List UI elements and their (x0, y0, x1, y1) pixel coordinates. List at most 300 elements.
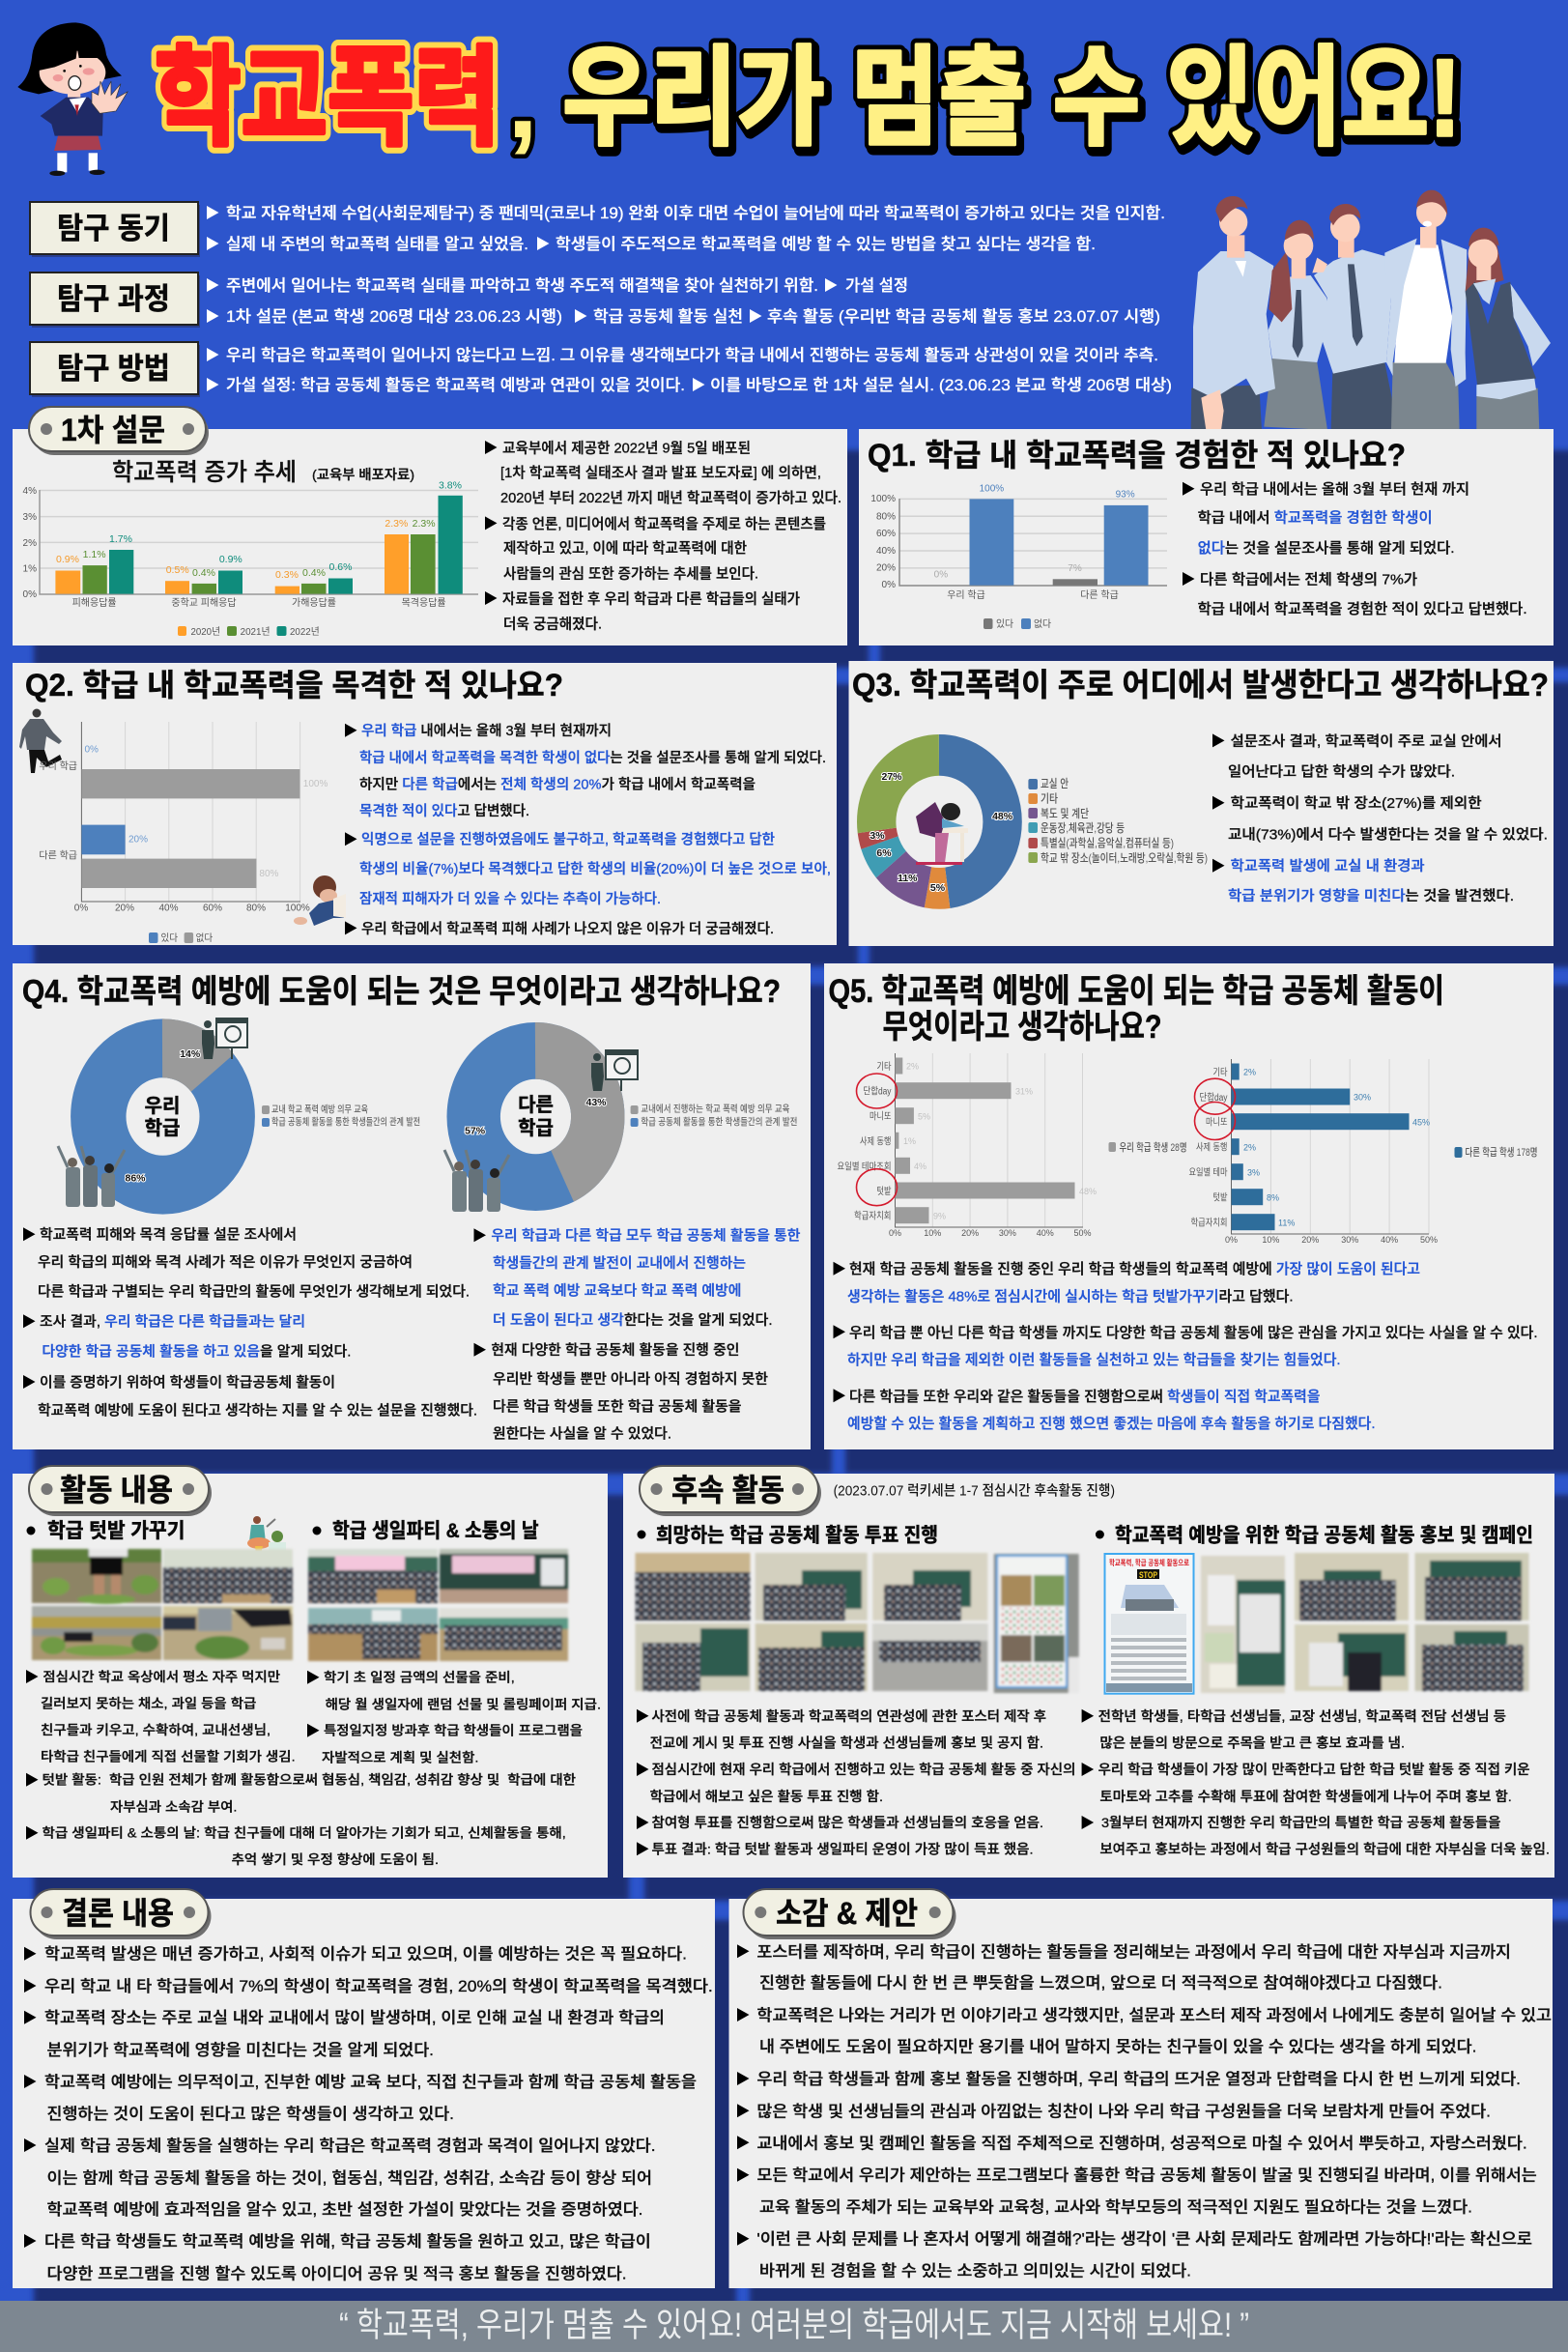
bar chart: school violence trend: 0% (23, 589, 37, 600)
text block: 생각하는 활동은 48%로 점심시간에 실시하는 학급 텃밭가꾸기라고 답했다. (847, 1289, 1293, 1305)
text block: vote notes: 사전에 학급 공동체 활동과 학교폭력의 연관성에 관한 포스터 제작 후 (651, 1708, 1046, 1724)
text block: 학급 내에서 학교폭력을 목격한 학생이 없다는 것을 설문조사를 통해 알게 되었다. (359, 750, 826, 766)
donut chart: 다른 학급: 57% (465, 1126, 486, 1137)
bar chart: 우리 학급 학생: 50% (1073, 1228, 1092, 1238)
photos: campaign (1201, 1553, 1528, 1693)
bar chart Q1: 우리 학급 (947, 589, 985, 601)
heading Q2: Q2. 학급 내 학교폭력을 목격한 적 있나요? (25, 668, 563, 703)
text block: 교내(73%)에서 다수 발생한다는 것을 알 수 있었다. (1228, 826, 1548, 843)
text block: reflections: 학교폭력은 나와는 거리가 먼 이야기라고 생각했지만, 설문과 포스터 제작 과정에서 나에게도 충분히 일어날 수 있고 (756, 2006, 1552, 2024)
text block: reflections: '이런 큰 사회 문제를 나 혼자서 어떻게 해결해?'라는 생각이 '큰 사회 문제라도 함께라면 가능하다!'라는 확신으로 (756, 2230, 1532, 2249)
bar chart: 다른 학급 학생: 30% (1341, 1235, 1358, 1245)
legend: 2020년 (191, 626, 220, 638)
bar chart: 다른 학급 학생: 단합day (1200, 1092, 1227, 1104)
text block right: 학생들간의 관계 발전이 교내에서 진행하는 (493, 1255, 746, 1272)
donut chart: 다른 학급: 학급 (518, 1117, 554, 1139)
bar chart: 다른 학급 학생: 45% (1412, 1117, 1430, 1127)
legend (149, 932, 213, 944)
text block right: 원한다는 사실을 알 수 있었다. (493, 1426, 671, 1443)
bar chart Q1: 100% (980, 483, 1004, 495)
heading Q5 (829, 973, 1444, 1046)
text block: 하지만 우리 학급을 제외한 이런 활동들을 실천하고 있는 학급들을 찾기는 힘들었다. (847, 1352, 1341, 1368)
text block: reflections: 진행한 활동들에 다시 한 번 큰 뿌듯함을 느꼈으며, 앞으로 더 적극적으로 참여해야겠다고 다짐했다. (759, 1974, 1442, 1993)
text block: inquiry summary lines: 1차 설문 (본교 학생 206명 대상 23.06.23 시행) (226, 307, 562, 326)
text block: birthday notes (307, 1671, 601, 1764)
bar chart: 우리 학급 학생: 단합day (864, 1086, 891, 1098)
bar chart: 다른 학급 학생: 학급자치회 (1190, 1218, 1227, 1229)
text block: 우리 학급에서 학교폭력 피해 사례가 나오지 않은 이유가 더 궁금해졌다. (361, 921, 774, 937)
text block: reflections: 교육 활동의 주체가 되는 교육부와 교육청, 교사와 학부모등의 적극적인 지원도 필요하다는 것을 느꼈다. (759, 2197, 1472, 2216)
bar chart: 다른 학급 학생: 10% (1262, 1235, 1279, 1245)
bar chart Q1: 0% (882, 580, 896, 590)
text block: reflections: 교내에서 홍보 및 캠페인 활동을 직접 주체적으로 진행하며, 성공적으로 마칠 수 있어서 뿌듯하고, 자랑스러웠다. (756, 2134, 1527, 2152)
donut chart: 우리 학급 (99, 1048, 420, 1185)
bar chart: school violence trend: 0.5% (166, 564, 189, 576)
text block left: 학교폭력 예방에 도움이 된다고 생각하는 지를 알 수 있는 설문을 진행했다. (38, 1403, 477, 1420)
icon: crying child (294, 875, 346, 926)
icon: gardener (247, 1516, 286, 1554)
pill heading: 후속 활동: 후속 활동 (671, 1473, 784, 1507)
poster: campaign (1105, 1554, 1194, 1694)
bar chart: school violence trend: 피해응답률 (72, 596, 117, 609)
bar chart: 다른 학급 학생: 2% (1243, 1067, 1256, 1076)
text block: 교육부에서 제공한 2022년 9월 5일 배포된 (502, 440, 751, 456)
panel: Q2 (13, 663, 837, 945)
text block: 학교폭력이 학교 밖 장소(27%)를 제외한 (1231, 795, 1482, 812)
red circles (856, 1074, 897, 1206)
text block right: 현재 다양한 학급 공동체 활동을 진행 중인 (491, 1342, 739, 1359)
donut chart: 다른 학급: 43% (585, 1097, 607, 1108)
title (155, 38, 1464, 162)
text block: reflections: 모든 학교에서 우리가 제안하는 프로그램보다 훌륭한 학급 공동체 활동이 발굴 및 진행되길 바라며, 이를 위해서는 (756, 2166, 1537, 2185)
text block: conclusions: 실제 학급 공동체 활동을 실행하는 우리 학급은 학교폭력 경험과 목격이 일어나지 않았다. (44, 2137, 656, 2155)
text block: campaign notes: 전학년 학생들, 타학급 선생님들, 교장 선생님, 학교폭력 전담 선생님 등 (1098, 1708, 1506, 1724)
photos: garden (32, 1549, 293, 1660)
text block: vote notes: 투표 결과: 학급 텃밭 활동과 생일파티 운영이 가장 많이 득표 했음. (651, 1842, 1034, 1857)
text block: garden notes: 길러보지 못하는 채소, 과일 등을 학급 (41, 1697, 256, 1711)
donut chart Q3: 6% (876, 847, 892, 859)
bar chart: 다른 학급 학생: 50% (1420, 1235, 1438, 1245)
text block: 목격한 적이 있다고 답변했다. (359, 803, 529, 819)
text block: garden notes: 친구들과 키우고, 수확하여, 교내선생님, (41, 1723, 271, 1737)
text block left: 다른 학급과 구별되는 우리 학급만의 활동에 무엇인가 생각해보게 되었다. (38, 1283, 470, 1300)
bar chart: 다른 학급 학생: 20% (1301, 1235, 1319, 1245)
text block: activity effects: 학급 생일파티 & 소통의 날: 학급 친구들에 대해 더 알아가는 기회가 되고, 신체활동을 통해, (43, 1826, 566, 1841)
bar chart: school violence trend: 1.1% (83, 549, 106, 560)
text block (1183, 481, 1527, 617)
text block: 2020년 부터 2022년 까지 매년 학교폭력이 증가하고 있다. (500, 490, 841, 506)
text block: birthday notes: 학기 초 일정 금액의 선물을 준비, (324, 1671, 515, 1685)
bar chart Q1 (870, 483, 1167, 630)
heading Q5: 무엇이라고 생각하나요? (883, 1009, 1161, 1046)
bar chart: 다른 학급 학생: 마니또 (1206, 1117, 1227, 1129)
text block: reflections: 포스터를 제작하며, 우리 학급이 진행하는 활동들을 정리해보는 과정에서 우리 학급에 대한 자부심과 지금까지 (756, 1942, 1511, 1961)
text block: inquiry summary lines: 가설 설정 (845, 276, 908, 295)
text block: vote notes: 학급에서 해보고 싶은 활동 투표 진행 함. (650, 1789, 883, 1804)
text block: 예방할 수 있는 활동을 계획하고 진행 했으면 좋겠는 마음에 후속 활동을 하기로 다짐했다. (847, 1416, 1376, 1432)
bar chart: 다른 학급 학생 (1188, 1059, 1538, 1245)
pill heading: 1차 설문: 1차 설문 (61, 413, 165, 447)
bar chart Q1: 93% (1116, 489, 1135, 501)
bar chart: 다른 학급 학생: 3% (1247, 1167, 1260, 1177)
chart heading: 학교폭력 증가 추세 (112, 459, 297, 486)
text block: 학급 내에서 학교폭력을 경험한 적이 있다고 답변했다. (1198, 601, 1527, 617)
text block: inquiry summary lines: 실제 내 주변의 학교폭력 실태를 알고 싶었음. (226, 235, 528, 253)
text block: 제작하고 있고, 이에 따라 학교폭력에 대한 (503, 540, 747, 557)
subheading: 학급 생일파티 & 소통의 날: 학급 생일파티 & 소통의 날 (332, 1520, 539, 1542)
bar chart: 우리 학급 학생: 5% (918, 1111, 930, 1121)
text block: reflections: 우리 학급 학생들과 함께 홍보 활동을 진행하며, 우리 학급의 뜨거운 열정과 단합력을 다시 한 번 느끼게 되었다. (756, 2070, 1521, 2088)
donut chart: 우리 학급: 86% (125, 1173, 146, 1185)
bar chart: 우리 학급 학생: 1% (903, 1136, 916, 1146)
text block: inquiry summary lines: 주변에서 일어나는 학교폭력 실태를 파악하고 학생 주도적 해결책을 찾아 실천하기 위함. (226, 276, 818, 295)
bar chart: school violence trend: 0.3% (275, 569, 299, 581)
text block: inquiry summary lines: 우리 학급은 학교폭력이 일어나지 않는다고 느낌. 그 이유를 생각해보다가 학급 내에서 진행하는 공동체 활동과 상관성이 있을 것이라 추측. (226, 346, 1158, 364)
bar chart Q1: 40% (876, 546, 896, 557)
chart heading (112, 459, 414, 486)
icon: presenter 1 (202, 1018, 247, 1059)
text block: 자료들을 접한 후 우리 학급과 다른 학급들의 실태가 (502, 590, 800, 607)
text block right: 우리 학급과 다른 학급 모두 학급 공동체 활동을 통한 (491, 1228, 800, 1245)
poster: campaign: STOP (1139, 1570, 1157, 1580)
text block: birthday notes: 특정일지정 방과후 학급 학생들이 프로그램을 (324, 1724, 583, 1738)
text block right: 다른 학급 학생들 또한 학급 공동체 활동을 (493, 1398, 742, 1415)
pill heading: 후속 활동 (640, 1466, 821, 1516)
bar chart: 우리 학급 학생: 9% (933, 1212, 946, 1221)
donut chart Q3: 27% (881, 771, 902, 783)
panel: 활동 내용 (13, 1466, 608, 1878)
bar chart Q1: 7% (1068, 563, 1082, 574)
legend: 다른 학급 학생 178명 (1465, 1146, 1538, 1159)
bar chart: 다른 학급 학생: 40% (1381, 1235, 1398, 1245)
bar chart: 우리 학급 학생 (837, 1053, 1186, 1238)
bar chart Q1: 20% (876, 562, 896, 574)
heading Q4: Q4. 학교폭력 예방에 도움이 되는 것은 무엇이라고 생각하나요? (22, 973, 781, 1009)
icon: girl in uniform making stop gesture (17, 22, 128, 176)
bar chart: school violence trend: 4% (23, 486, 37, 497)
bar chart: 우리 학급 학생: 기타 (877, 1061, 891, 1073)
bar chart: 다른 학급 학생: 2% (1243, 1142, 1256, 1152)
legend: 특별실(과학실,음악실,컴퓨터실 등) (1041, 835, 1174, 850)
text block: 하지만 다른 학급에서는 전체 학생의 20%가 학급 내에서 학교폭력을 (359, 776, 755, 792)
bar chart Q1: 60% (876, 529, 896, 539)
text block: 각종 언론, 미디어에서 학교폭력을 주제로 하는 콘텐츠를 (502, 516, 826, 532)
bar chart: school violence trend: 가해응답률 (292, 596, 336, 609)
legend: 없다 (196, 932, 213, 944)
bar chart Q2: 80% (246, 903, 266, 914)
legend: 2022년 (290, 626, 320, 638)
bar chart: 우리 학급 학생: 사제 동행 (860, 1135, 891, 1147)
text block (833, 1261, 1538, 1432)
text block left: 조사 결과, 우리 학급은 다른 학급들과는 달리 (40, 1314, 305, 1331)
bar chart: 우리 학급 학생: 학급자치회 (854, 1211, 891, 1222)
text block right: 학교 폭력 예방 교육보다 학교 폭력 예방에 (493, 1282, 742, 1299)
text block: 학생의 비율(7%)보다 목격했다고 답한 학생의 비율(20%)이 더 높은 것으로 보아, (359, 861, 831, 877)
bar chart Q2: 0% (84, 744, 99, 756)
red circles (1194, 1078, 1235, 1140)
text block: reflections: 많은 학생 및 선생님들의 관심과 아낌없는 칭찬이 나와 우리 학급 구성원들을 더욱 보람차게 만들어 주었다. (756, 2102, 1491, 2120)
bar chart Q2: 100% (285, 903, 310, 914)
panel: 소감 & 제안 (728, 1889, 1553, 2288)
bar chart Q2: 80% (259, 869, 279, 879)
bar chart: 우리 학급 학생: 요일별 테마조회 (837, 1161, 891, 1172)
panel: 1차 설문 (13, 407, 847, 645)
text block: reflections: 내 주변에도 도움이 필요하지만 용기를 내어 말하지 못하는 친구들이 있을 수 있다는 생각을 하게 되었다. (759, 2038, 1476, 2056)
text block: campaign notes (1082, 1708, 1550, 1857)
legend: 교내에서 진행하는 학교 폭력 예방 의무 교육 (641, 1103, 789, 1115)
legend: 2021년 (241, 626, 271, 638)
bar chart: 우리 학급 학생: 10% (924, 1228, 941, 1238)
text block: 우리 학급 뿐 아닌 다른 학급 학생들 까지도 다양한 학급 공동체 활동에 많은 관심을 가지고 있다는 사실을 알 수 있다. (849, 1325, 1538, 1341)
text block: conclusions (24, 1945, 713, 2282)
legend (984, 617, 1051, 630)
bar chart: 우리 학급 학생: 40% (1037, 1228, 1054, 1238)
text block right: 더 도움이 된다고 생각 한다는 것을 알게 되었다. (493, 1312, 773, 1329)
legend: 있다 (996, 618, 1013, 630)
donut chart: 우리 학급: 우리 (145, 1095, 180, 1117)
bar chart: school violence trend (23, 479, 478, 638)
text block: conclusions: 이는 함께 학급 공동체 활동을 하는 것이, 협동심, 책임감, 성취감, 소속감 등이 향상 되어 (46, 2168, 652, 2187)
donut chart: 다른 학급: 다른 (518, 1094, 554, 1116)
title: 우리가 멈출 수 있어요! (562, 38, 1461, 158)
bar chart: school violence trend: 0.9% (219, 554, 242, 565)
bar chart: 우리 학급 학생: 2% (906, 1061, 919, 1071)
title: 우리가 멈출 수 있어요! (562, 38, 1461, 158)
bar chart: 다른 학급 학생: 0% (1225, 1235, 1238, 1245)
bar chart Q2: 40% (158, 903, 179, 914)
text block: birthday notes: 자발적으로 계획 및 실천함. (322, 1750, 478, 1764)
bar chart Q2: 20% (128, 835, 148, 845)
bar chart: 다른 학급 학생: 30% (1354, 1092, 1371, 1102)
bar chart: 우리 학급 학생: 마니또 (870, 1111, 891, 1123)
bar chart Q1: 80% (876, 512, 896, 522)
text block: 다른 학급들 또한 우리와 같은 활동들을 진행함으로써 학생들이 직접 학교폭력을 (849, 1389, 1321, 1405)
bar chart: school violence trend: 2% (23, 538, 37, 549)
text block: inquiry summary lines (207, 204, 1172, 394)
legend: 교내 학교 폭력 예방 의무 교육 (271, 1104, 368, 1115)
text block: campaign notes: 3월부터 현재까지 진행한 우리 학급만의 특별한 학급 공동체 활동들을 (1101, 1815, 1501, 1830)
photos: vote (636, 1553, 1079, 1693)
icon: presenter 2 (591, 1050, 638, 1091)
bar chart: school violence trend: 0.9% (56, 554, 79, 565)
bar chart Q1: 100% (870, 494, 896, 504)
text block: conclusions: 학교폭력 발생은 매년 증가하고, 사회적 이슈가 되고 있으며, 이를 예방하는 것은 꼭 필요하다. (44, 1945, 687, 1964)
text block: inquiry summary lines: 가설 설정: 학급 공동체 활동은 학교폭력 예방과 연관이 있을 것이다. (226, 376, 685, 394)
pill heading: 결론 내용: 결론 내용 (62, 1896, 174, 1931)
heading Q1: Q1. 학급 내 학교폭력을 경험한 적 있나요? (868, 438, 1406, 473)
legend (262, 1104, 420, 1129)
donut chart Q3: 3% (870, 830, 885, 842)
text block: inquiry summary lines: 학생들이 주도적으로 학교폭력을 예방 할 수 있는 방법을 찾고 싶다는 생각을 함. (556, 235, 1096, 253)
legend (1028, 777, 1208, 865)
bar chart: 우리 학급 학생: 30% (999, 1228, 1016, 1238)
text block left (23, 1227, 477, 1420)
text block: conclusions: 분위기가 학교폭력에 영향을 미친다는 것을 알게 되었다. (46, 2041, 434, 2059)
box label: 탐구 동기: 탐구 동기 (57, 212, 170, 245)
bar chart: 다른 학급 학생: 기타 (1213, 1067, 1227, 1078)
icon: group of people 1 (58, 1146, 125, 1207)
bar chart: school violence trend: 1.7% (109, 533, 132, 545)
text block: campaign notes: 많은 분들의 방문으로 주목을 받고 큰 홍보 효과를 냄. (1099, 1735, 1405, 1751)
bar chart Q1: 다른 학급 (1080, 589, 1119, 601)
legend: 없다 (1034, 617, 1051, 630)
bar chart: school violence trend: 2.3% (413, 518, 436, 530)
pill heading: 소감 & 제안: 소감 & 제안 (776, 1896, 918, 1931)
bar chart: 다른 학급 학생: 요일별 테마 (1188, 1167, 1227, 1179)
text block: garden notes (26, 1670, 296, 1764)
bar chart: 우리 학급 학생: 0% (889, 1228, 901, 1238)
text block: vote notes: 전교에 게시 및 투표 진행 사실을 학생과 선생님들께 홍보 및 공지 함. (650, 1735, 1043, 1751)
panel: Q5 (824, 963, 1554, 1449)
text block: inquiry summary lines: 학급 공동체 활동 실천 (593, 307, 743, 326)
text block: campaign notes: 토마토와 고추를 수확해 투표에 참여한 학생들에게 나누어 주며 홍보 함. (1099, 1789, 1512, 1804)
text block: inquiry summary lines: 학교 자유학년제 수업(사회문제탐구) 중 팬데믹(코로나 19) 완화 이후 대면 수업이 늘어남에 따라 학교폭력이 증가하고 있다는 것을 인지함. (226, 204, 1165, 222)
bar chart: 다른 학급 학생: 텃밭 (1213, 1192, 1227, 1204)
bar chart: school violence trend: 3% (23, 512, 37, 523)
text block: birthday notes: 해당 월 생일자에 랜덤 선물 및 롤링페이퍼 지급. (326, 1696, 601, 1711)
text block left: 다양한 학급 공동체 활동을 하고 있음 을 알게 되었다. (42, 1344, 351, 1361)
text block (345, 723, 831, 937)
text block: conclusions: 학교폭력 예방에는 의무적이고, 진부한 예방 교육 보다, 직접 친구들과 함께 학급 공동체 활동을 (44, 2073, 697, 2091)
text block: activity effects: 추억 쌓기 및 우정 향상에 도움이 됨. (232, 1852, 439, 1867)
text block: 더욱 궁금해졌다. (503, 617, 602, 632)
title: , (507, 40, 538, 160)
text block: conclusions: 진행하는 것이 도움이 된다고 많은 학생들이 생각하고 있다. (46, 2105, 454, 2123)
panel: 결론 내용 (13, 1889, 715, 2288)
bottom banner: “ 학교폭력, 우리가 멈출 수 있어요! 여러분의 학급에서도 지금 시작해 보세요! ” (339, 2307, 1249, 2344)
text block: campaign notes: 보여주고 홍보하는 과정에서 학급 구성원들의 학급에 대한 자부심을 더욱 높임. (1099, 1842, 1550, 1857)
icon: student slumped at desk (916, 802, 968, 865)
heading Q5: Q5. 학교폭력 예방에 도움이 되는 학급 공동체 활동이 (829, 973, 1444, 1010)
text block: 사람들의 관심 또한 증가하는 추세를 보인다. (503, 565, 758, 582)
legend: 운동장,체육관,강당 등 (1041, 821, 1125, 835)
box label: 탐구 방법 (30, 342, 200, 397)
text block: campaign notes: 우리 학급 학생들이 가장 많이 만족한다고 답한 학급 텃밭 활동 중 직접 키운 (1098, 1762, 1530, 1777)
pill heading: 1차 설문 (29, 407, 209, 455)
title: 학교폭력 (155, 38, 500, 158)
text block: [1차 학교폭력 실태조사 결과 발표 보도자료] 에 의하면, (500, 465, 821, 481)
text block: conclusions: 다른 학급 학생들도 학교폭력 예방을 위해, 학급 공동체 활동을 원하고 있고, 많은 학급이 (44, 2232, 651, 2251)
bar chart: school violence trend: 0.4% (192, 567, 215, 579)
donut chart Q3: 5% (930, 882, 946, 894)
donut chart: 다른 학급 (465, 1050, 797, 1183)
legend: 교실 안 (1041, 777, 1069, 790)
bar chart Q2: 0% (74, 903, 88, 914)
donut chart Q3: 48% (992, 811, 1013, 822)
panel: 후속 활동 (623, 1466, 1554, 1878)
text block: garden notes: 점심시간 학교 옥상에서 평소 자주 먹지만 (43, 1670, 280, 1684)
bar chart Q2: 우리 학급 (39, 760, 77, 772)
text block: reflections (737, 1942, 1552, 2280)
illustration: five students in uniforms (1191, 190, 1551, 430)
text block: activity effects: 자부심과 소속감 부여. (110, 1799, 237, 1814)
panel: Q4 (13, 963, 811, 1449)
text block right (473, 1228, 800, 1443)
panel drop shadows (34, 450, 1568, 2307)
panel: Q3 (848, 661, 1554, 946)
legend (631, 1103, 797, 1129)
chart heading: (교육부 배포자료) (312, 467, 414, 482)
donut chart: 우리 학급: 14% (180, 1048, 201, 1060)
bar chart: 다른 학급 학생: 8% (1267, 1192, 1279, 1202)
text block: 다른 학급에서는 전체 학생의 7%가 (1200, 572, 1417, 588)
text block left: 우리 학급의 피해와 목격 사례가 적은 이유가 무엇인지 궁금하여 (38, 1254, 413, 1271)
bar chart Q2: 60% (203, 903, 222, 914)
text block: conclusions: 학교폭력 장소는 주로 교실 내와 교내에서 많이 발생하며, 이로 인해 교실 내 환경과 학급의 (44, 2009, 665, 2027)
panel: Q1 (859, 429, 1554, 645)
date note: (2023.07.07 럭키세븐 1-7 점심시간 후속활동 진행) (834, 1482, 1115, 1500)
bar chart Q2 (39, 722, 328, 944)
subheading: campaign: 학교폭력 예방을 위한 학급 공동체 활동 홍보 및 캠페인 (1115, 1525, 1533, 1546)
pill heading: 소감 & 제안 (744, 1889, 956, 1939)
box label: 탐구 과정 (30, 272, 200, 328)
text block: 익명으로 설문을 진행하였음에도 불구하고, 학교폭력을 경험했다고 답한 (361, 832, 775, 848)
text block left: 이를 증명하기 위하여 학생들이 학급공동체 활동이 (40, 1374, 335, 1391)
box label: 탐구 동기 (30, 202, 200, 257)
bottom banner (0, 2301, 1568, 2352)
bar chart Q2: 100% (303, 779, 328, 789)
bar chart: school violence trend: 2.3% (385, 518, 408, 530)
box label: 탐구 방법: 탐구 방법 (57, 352, 170, 386)
donut chart Q3: 11% (898, 873, 918, 884)
legend: 있다 (160, 932, 178, 944)
donut chart Q3 (870, 755, 1208, 894)
bar chart: school violence trend: 중학교 피해응답 (171, 596, 237, 609)
legend: 복도 및 계단 (1041, 807, 1089, 820)
text block: inquiry summary lines: 이를 바탕으로 한 1차 설문 실시. (23.06.23 본교 학생 206명 대상) (710, 376, 1172, 394)
legend: 기타 (1041, 792, 1058, 806)
subheading: 학급 텃밭 가꾸기: 학급 텃밭 가꾸기 (47, 1520, 185, 1542)
bar chart: 우리 학급 학생: 31% (1015, 1086, 1033, 1096)
bar chart: 우리 학급 학생: 텃밭 (877, 1186, 891, 1197)
text block (485, 440, 841, 632)
legend (178, 626, 320, 638)
text block: activity effects: 텃밭 활동: 학급 인원 전체가 함께 활동함으로써 협동심, 책임감, 성취감 향상 및 학급에 대한 (43, 1773, 576, 1788)
text block: vote notes (637, 1708, 1075, 1857)
subheading: vote: 희망하는 학급 공동체 활동 투표 진행 (656, 1525, 938, 1546)
text block: 학교폭력 발생에 교실 내 환경과 (1231, 858, 1425, 875)
legend: 학급 공동체 활동을 통한 학생들간의 관계 발전 (271, 1115, 420, 1129)
bar chart: school violence trend: 3.8% (439, 479, 462, 491)
text block: vote notes: 점심시간에 현재 우리 학급에서 진행하고 있는 학급 공동체 활동 중 자신의 (651, 1762, 1075, 1777)
heading Q3: Q3. 학교폭력이 주로 어디에서 발생한다고 생각하나요? (852, 667, 1549, 703)
poster: campaign: 학교폭력, 학급 공동체 활동으로 (1109, 1558, 1190, 1567)
icon: group of people 2 (444, 1150, 509, 1212)
bar chart Q2: 20% (115, 903, 134, 914)
text block: 학급 분위기가 영향을 미친다 는 것을 발견했다. (1228, 888, 1514, 904)
text block: garden notes: 타학급 친구들에게 직접 선물할 기회가 생김. (41, 1749, 296, 1764)
title: 우리가 멈출 수 있어요! (565, 42, 1464, 162)
text block left: 학교폭력 피해와 목격 응답률 설문 조사에서 (40, 1227, 297, 1244)
text block: activity effects (26, 1773, 576, 1867)
pill heading: 결론 내용 (31, 1889, 211, 1939)
legend: 학교 밖 장소(놀이터,노래방,오락실,학원 등) (1041, 850, 1208, 865)
text block: 우리 학급 내에서는 올해 3월 부터 현재 까지 (1200, 481, 1469, 498)
text block: 우리 학급 내에서는 올해 3월 부터 현재까지 (361, 723, 612, 739)
box label: 탐구 과정: 탐구 과정 (57, 282, 170, 316)
bar chart Q2: 다른 학급 (39, 850, 77, 862)
text block: 일어난다고 답한 학생의 수가 많았다. (1228, 763, 1455, 780)
text block: inquiry summary lines: 후속 활동 (우리반 학급 공동체 활동 홍보 23.07.07 시행) (767, 307, 1160, 326)
bar chart: school violence trend: 0.6% (329, 561, 352, 573)
bar chart: school violence trend: 목격응답률 (402, 596, 446, 609)
text block: 학급 내에서 학교폭력을 경험한 학생이 (1198, 510, 1433, 526)
bar chart: 우리 학급 학생: 4% (914, 1162, 927, 1171)
donut chart: 우리 학급: 학급 (145, 1117, 180, 1139)
legend: 학급 공동체 활동을 통한 학생들간의 관계 발전 (641, 1116, 797, 1129)
bar chart: 다른 학급 학생: 11% (1278, 1218, 1295, 1227)
text block right: 우리반 학생들 뿐만 아니라 아직 경험하지 못한 (493, 1371, 768, 1388)
